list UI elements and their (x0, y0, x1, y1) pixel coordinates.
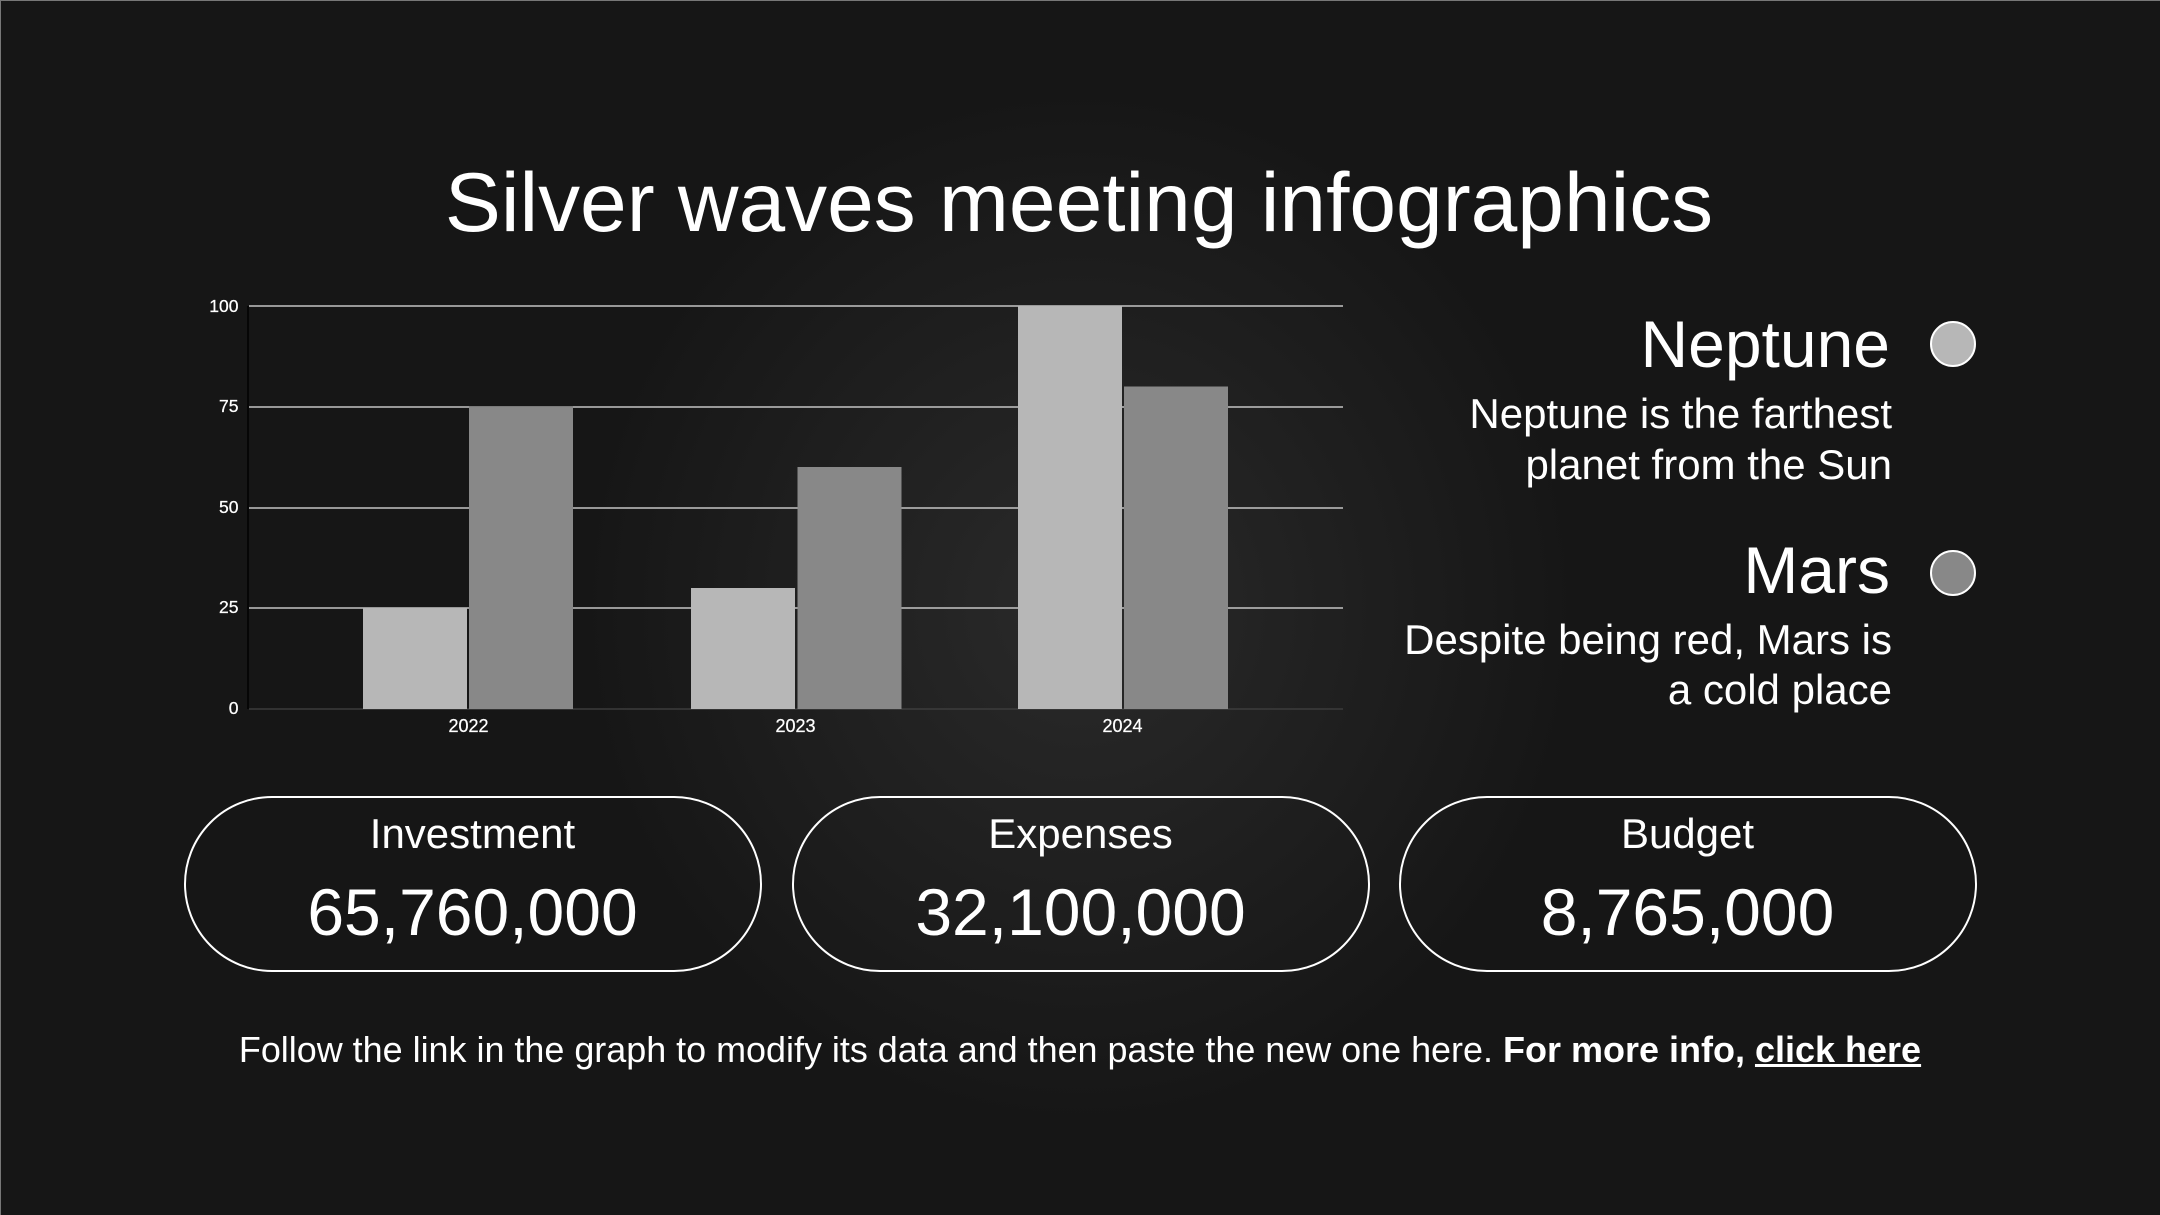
Investment label: Investment (370, 810, 575, 856)
x axis labels (448, 716, 1143, 736)
chart grid and axes (248, 306, 1343, 709)
legend: Mars (1404, 532, 1892, 713)
Neptune description (1469, 390, 1892, 488)
legend: Neptune (1469, 306, 1892, 488)
Budget label: Budget (1621, 810, 1754, 856)
legend marker: Mars (1930, 550, 1976, 596)
x axis labels: 2024 (1102, 716, 1143, 736)
y axis labels (209, 296, 239, 718)
y axis labels: 50 (219, 497, 239, 517)
y axis labels: 75 (219, 396, 238, 416)
y axis labels: 0 (229, 698, 239, 718)
Mars heading: Mars (1743, 532, 1890, 606)
x axis labels: 2022 (448, 716, 489, 736)
Expenses value: 32,100,000 (915, 874, 1246, 948)
x axis labels: 2023 (775, 716, 816, 736)
Neptune description: Neptune is the farthest (1469, 390, 1892, 437)
Mars description: a cold place (1668, 666, 1892, 713)
bars 2023 (691, 467, 902, 709)
Investment value: 65,760,000 (307, 874, 638, 948)
footer note: Follow the link in the graph to modify its data and then paste the new one here. For more info, click here (239, 1029, 1921, 1070)
panel: Expenses (792, 796, 1370, 972)
panel: Budget (1399, 796, 1977, 972)
Mars description: Despite being red, Mars is (1404, 616, 1892, 662)
panel: Investment (184, 796, 762, 972)
title: Silver waves meeting infographics (445, 155, 1713, 249)
bars 2024 (1018, 306, 1228, 709)
y axis labels: 25 (219, 597, 238, 617)
Neptune description: planet from the Sun (1525, 440, 1892, 488)
Budget value: 8,765,000 (1541, 874, 1834, 948)
Neptune heading: Neptune (1640, 306, 1890, 380)
y axis labels: 100 (209, 296, 239, 316)
bars 2022 (363, 406, 573, 709)
Expenses label: Expenses (988, 810, 1173, 856)
Mars description (1404, 616, 1892, 713)
legend marker: Neptune (1930, 321, 1976, 367)
